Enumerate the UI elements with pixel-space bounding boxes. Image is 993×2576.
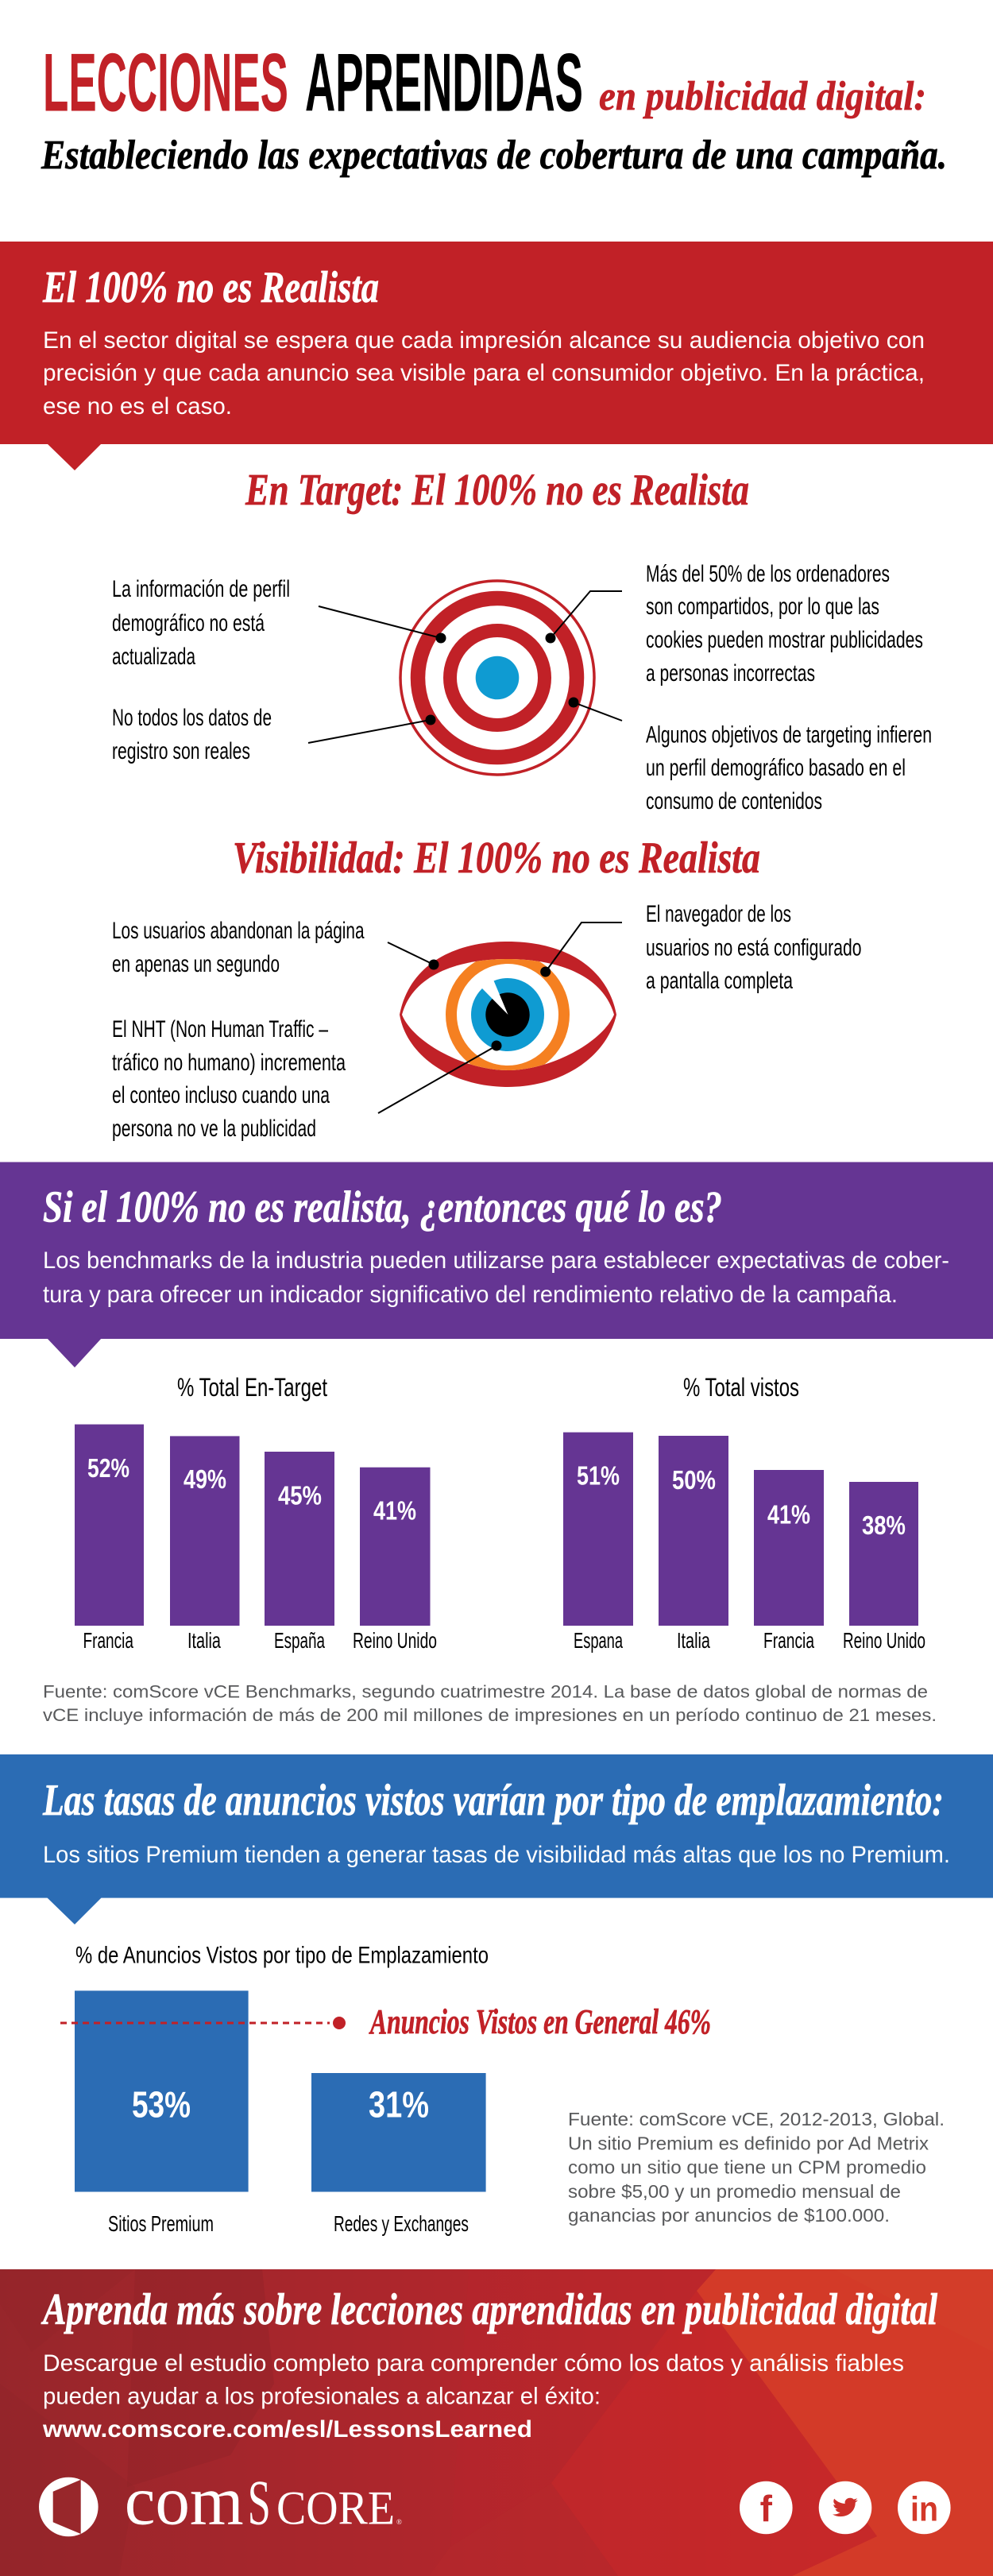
category labels: Reino Unido [843, 1628, 925, 1653]
icon: facebook [740, 2481, 793, 2534]
bar values: 45% [278, 1481, 322, 1510]
text block: Descargue el estudio completo para comprender cómo los datos y análisis fiables [43, 2350, 904, 2377]
callout: non human traffic: tráfico no humano) incrementa [112, 1050, 346, 1076]
icon: linkedin [898, 2481, 951, 2534]
bars [75, 1425, 431, 1626]
callout: abandonan la página: Los usuarios abandonan la página [112, 918, 365, 944]
bar values: 41% [373, 1496, 416, 1526]
source note: premium: ganancias por anuncios de $100.000. [568, 2205, 890, 2226]
callout: non human traffic: El NHT (Non Human Traffic – [112, 1016, 328, 1042]
category labels: Italia [677, 1628, 710, 1653]
logo: comScore [39, 2463, 402, 2540]
category labels [574, 1628, 925, 1653]
bar values: 52% [87, 1453, 129, 1483]
callout: perfil demográfico [112, 576, 290, 670]
bars [563, 1433, 918, 1626]
source note: benchmarks: Fuente: comScore vCE Benchmarks, segundo cuatrimestre 2014. La base de datos global de normas de [43, 1682, 928, 1702]
category labels: Redes y Exchanges [334, 2211, 469, 2236]
callout lines: target [308, 591, 622, 743]
category labels: Francia [83, 1628, 133, 1653]
text block: ese no es el caso. [43, 393, 232, 420]
heading: Si el 100% no es realista, ¿entonces qué lo es? [43, 1182, 722, 1232]
bar chart: % total en-target [75, 1373, 437, 1653]
callout: abandonan la página [112, 918, 365, 977]
text block: Los sitios Premium tienden a generar tasas de visibilidad más altas que los no Premium. [43, 1842, 950, 1868]
text block [43, 1247, 949, 1308]
callout lines: eye [378, 922, 622, 1113]
callout: ordenadores compartidos: Más del 50% de los ordenadores [646, 561, 890, 587]
source note: premium: Un sitio Premium es definido por Ad Metrix [568, 2133, 929, 2153]
source note: premium: como un sitio que tiene un CPM promedio [568, 2157, 926, 2178]
text block: precisión y que cada anuncio sea visible para el consumidor objetivo. En la práctica, [43, 360, 925, 386]
logo: comScore: com [125, 2463, 244, 2540]
callout dots: eye [429, 960, 551, 1050]
callout: non human traffic: el conteo incluso cuando una [112, 1082, 330, 1108]
callout: non human traffic: persona no ve la publicidad [112, 1116, 316, 1142]
text block: pueden ayudar a los profesionales a alcanzar el éxito: [43, 2384, 601, 2410]
panel: el 100% no es realista [0, 242, 993, 470]
logo: comScore: S [248, 2469, 271, 2539]
icon: target [400, 581, 594, 775]
callout: perfil demográfico: actualizada [112, 644, 195, 670]
bar values: 50% [672, 1465, 716, 1495]
source note: premium [568, 2109, 945, 2226]
text block: tura y para ofrecer un indicador significativo del rendimiento relativo de la campaña. [43, 1282, 898, 1308]
icon: twitter [819, 2481, 871, 2534]
callout: datos de registro: registro son reales [112, 738, 250, 764]
callout: navegador [646, 901, 861, 994]
logo: comScore: ® [396, 2518, 402, 2526]
text block: Los benchmarks de la industria pueden utilizarse para establecer expectativas de cober- [43, 1247, 949, 1274]
callout: non human traffic [112, 1016, 346, 1142]
text block: En el sector digital se espera que cada impresión alcance su audiencia objetivo con [43, 327, 925, 354]
category labels: Francia [763, 1628, 814, 1653]
callout: perfil demográfico: demográfico no está [112, 610, 265, 636]
callout: navegador: El navegador de los [646, 901, 791, 927]
source note: benchmarks: vCE incluye información de más de 200 mil millones de impresiones en un período continuo de 21 meses. [43, 1705, 937, 1725]
callout: ordenadores compartidos [646, 561, 923, 687]
callout: objetivos de targeting: consumo de contenidos [646, 788, 822, 814]
callout: navegador: usuarios no está configurado [646, 934, 861, 961]
title: APRENDIDAS [305, 37, 583, 129]
panel: si el 100% no es realista [0, 1162, 993, 1367]
link: www.comscore.com/esl/LessonsLearned [42, 2416, 532, 2443]
callout dots: target [426, 632, 578, 725]
chart title: % Total vistos [683, 1373, 799, 1402]
average label: Anuncios Vistos en General 46% [369, 2002, 711, 2041]
heading: visibilidad: Visibilidad: El 100% no es Realista [233, 834, 760, 883]
icon: linkedin: in [910, 2490, 938, 2528]
source note: benchmarks [43, 1682, 937, 1725]
icon: eye [400, 942, 616, 1087]
source note: premium: Fuente: comScore vCE, 2012-2013, Global. [568, 2109, 945, 2129]
category labels [83, 1628, 437, 1653]
callout: datos de registro: No todos los datos de [112, 705, 272, 731]
callout: abandonan la página: en apenas un segundo [112, 951, 280, 977]
icon: facebook: f [760, 2488, 773, 2529]
category labels: Sitios Premium [108, 2211, 214, 2236]
title [43, 37, 926, 129]
source note: premium: sobre $5,00 y un promedio mensual de [568, 2181, 901, 2202]
bar values: 53% [132, 2083, 191, 2125]
callout: datos de registro [112, 705, 272, 764]
text block [42, 2350, 904, 2443]
bar values [577, 1461, 906, 1540]
logo: comScore: CORE [276, 2482, 395, 2535]
callout: perfil demográfico: La información de perfil [112, 576, 290, 602]
heading: en target: En Target: El 100% no es Realista [245, 466, 749, 515]
bar values: 38% [862, 1510, 906, 1540]
bar values: 31% [369, 2083, 429, 2125]
category labels: España [274, 1628, 325, 1653]
bar values: 51% [577, 1461, 620, 1491]
chart title: % de Anuncios Vistos por tipo de Emplazamiento [75, 1942, 489, 1969]
title: en publicidad digital: [599, 74, 926, 119]
heading: El 100% no es Realista [42, 263, 379, 312]
callout: navegador: a pantalla completa [646, 968, 793, 994]
panel: footer [0, 2269, 993, 2576]
title: LECCIONES [43, 37, 288, 129]
category labels: Italia [187, 1628, 221, 1653]
bar chart: % total vistos [563, 1373, 925, 1653]
callout: ordenadores compartidos: a personas incorrectas [646, 660, 815, 687]
bars [75, 1990, 486, 2191]
bar values: 41% [767, 1500, 810, 1529]
chart title: % Total En-Target [177, 1373, 327, 1402]
bar values: 49% [184, 1464, 226, 1494]
callout: ordenadores compartidos: son compartidos, por lo que las [646, 594, 879, 620]
average line [60, 2017, 346, 2029]
bar values [87, 1453, 416, 1526]
category labels: Reino Unido [353, 1628, 437, 1653]
bar chart: anuncios vistos por emplazamiento [60, 1942, 711, 2236]
category labels [108, 2211, 469, 2236]
panel: tasas de anuncios vistos [0, 1754, 993, 1924]
text block [43, 327, 925, 420]
callout: objetivos de targeting [646, 721, 932, 814]
bar values [132, 2083, 429, 2125]
category labels: Espana [574, 1628, 623, 1653]
